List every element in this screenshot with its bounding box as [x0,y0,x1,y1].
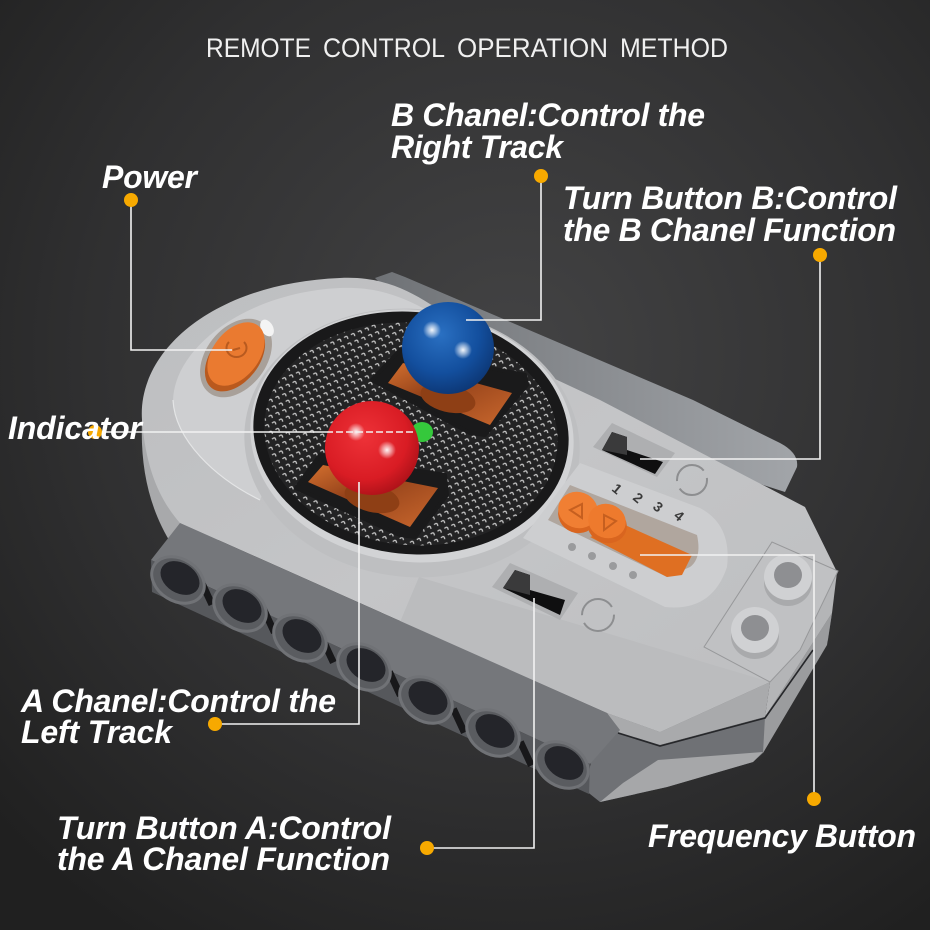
rounded left lip [142,420,220,545]
callout: indicator [8,410,416,446]
switch B [593,423,675,477]
channel numbers: 1 [609,480,625,497]
callout: A channel [20,482,359,750]
crease line [173,400,260,500]
channel numbers: 2 [630,489,646,506]
front chamfer [400,577,770,732]
rotation icon A [582,599,614,631]
callout: B channel: Right Track [391,129,565,165]
callout: turn button A: Turn Button A:Control [57,810,392,846]
title: CONTROL [323,33,445,63]
power button [185,305,287,411]
title [206,33,728,63]
channel numbers [609,480,687,524]
lego studs [704,542,838,682]
speaker mesh [241,296,581,570]
frequency slider [523,463,728,608]
back tab [375,272,797,492]
red joystick [296,401,447,537]
callout: B channel [391,97,705,320]
callout: turn button B: the B Chanel Function [563,212,896,248]
channel numbers: 3 [650,498,666,515]
callout: A channel: Left Track [21,714,174,750]
callout: frequency button: Frequency Button [648,818,916,854]
connector beam [143,523,620,798]
callout: power: Power [102,159,199,195]
callout: indicator: Indicator [8,410,144,446]
title: OPERATION [457,33,608,63]
remote control device [142,272,838,802]
callout: turn button A [57,598,534,877]
blue joystick [372,302,527,435]
callout: power [102,159,232,350]
callout: turn button B [563,180,898,459]
callout: B channel: B Chanel:Control the [391,97,705,133]
dish ring [231,292,593,594]
switch A [492,563,578,620]
callout: A channel: A Chanel:Control the [20,683,336,719]
rotation icon B [677,465,707,495]
title: METHOD [620,33,728,63]
callout: frequency button [640,555,916,854]
inner crescent [173,288,430,500]
indicator LED [411,422,433,442]
title: REMOTE [206,33,311,63]
callout: turn button A: the A Chanel Function [57,841,390,877]
channel numbers: 4 [671,507,687,524]
lower body facets [585,572,837,802]
top surface [142,278,837,732]
callout: turn button B: Turn Button B:Control [563,180,898,216]
